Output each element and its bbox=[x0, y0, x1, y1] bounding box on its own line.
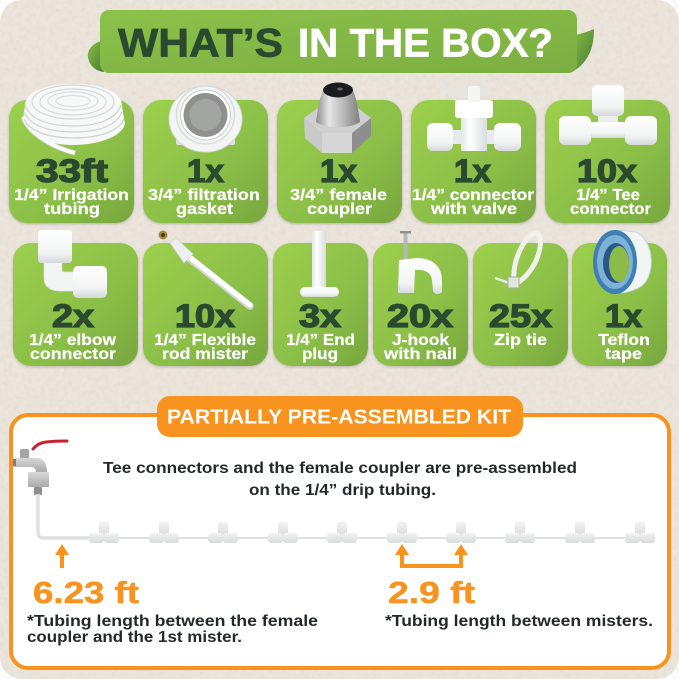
icon: J-hook with nail bbox=[398, 231, 442, 294]
label: tape bbox=[605, 346, 642, 363]
measurement: 6.23 ft: 6.23 ft bbox=[33, 575, 139, 610]
card: connector with valve bbox=[411, 86, 536, 223]
label: plug bbox=[302, 346, 338, 363]
note: mister spacing: *Tubing length between misters. bbox=[385, 613, 653, 630]
quantity: 1x bbox=[320, 153, 357, 189]
icon: elbow connector bbox=[38, 230, 107, 298]
quantity: 25x bbox=[489, 298, 552, 334]
label bbox=[570, 187, 651, 218]
title: white part: IN THE BOX? bbox=[298, 22, 553, 66]
quantity: 3x bbox=[299, 298, 341, 334]
icon: rod mister bbox=[158, 230, 250, 306]
quantity: 33ft bbox=[36, 153, 108, 189]
label: 3/4” female bbox=[290, 187, 387, 204]
label: 3/4” filtration bbox=[148, 187, 260, 204]
label: 1/4” connector bbox=[412, 187, 534, 204]
heading tab bbox=[157, 396, 523, 437]
icon: right leaf bbox=[572, 29, 594, 72]
label: gasket bbox=[176, 201, 233, 218]
label: 1/4” elbow bbox=[29, 332, 117, 349]
icon: Teflon tape bbox=[593, 230, 651, 294]
label bbox=[14, 187, 129, 218]
quantity: 2x bbox=[52, 298, 94, 334]
label: with valve bbox=[430, 201, 517, 218]
label: tubing bbox=[44, 201, 100, 218]
icon: faucet with red handle bbox=[13, 441, 67, 495]
text block: description bbox=[103, 460, 577, 499]
note: first mister distance bbox=[27, 613, 318, 646]
note: first mister distance: coupler and the 1st mister. bbox=[27, 629, 242, 646]
quantity: 10x bbox=[577, 153, 637, 189]
icon: tee connector bbox=[559, 85, 657, 145]
label: rod mister bbox=[162, 346, 248, 363]
icon: left leaf bbox=[88, 41, 104, 72]
label: 1/4” End bbox=[286, 332, 355, 349]
label bbox=[148, 187, 260, 218]
card: flexible rod mister bbox=[143, 230, 268, 366]
panel: partially pre-assembled kit bbox=[11, 396, 669, 668]
card: female coupler bbox=[277, 82, 402, 223]
icon: zip tie bbox=[495, 233, 540, 288]
card: zip tie bbox=[473, 233, 568, 366]
label: Teflon bbox=[598, 332, 650, 349]
title plate bbox=[100, 10, 577, 73]
quantity: 1x bbox=[454, 153, 491, 189]
label: coupler bbox=[307, 201, 372, 218]
quantity: 1x bbox=[605, 298, 642, 334]
heading tab: PARTIALLY PRE-ASSEMBLED KIT bbox=[167, 406, 511, 428]
icon: end plug bbox=[300, 231, 339, 297]
label bbox=[286, 332, 355, 363]
card: J-hook with nail bbox=[373, 231, 468, 366]
icon: coupler bbox=[304, 82, 371, 153]
measurement: 2.9 ft: 2.9 ft bbox=[388, 575, 475, 610]
icon: gasket bbox=[169, 86, 242, 152]
quantity: 10x bbox=[175, 298, 235, 334]
icon: tubing coil bbox=[23, 84, 125, 153]
card: 33ft tubing bbox=[9, 84, 134, 223]
drip tubing with tee connectors bbox=[38, 494, 655, 543]
label bbox=[29, 332, 117, 363]
card: Teflon tape bbox=[572, 230, 667, 366]
label bbox=[154, 332, 256, 363]
label: connector bbox=[30, 346, 116, 363]
label bbox=[598, 332, 650, 363]
card: tee connector bbox=[545, 85, 670, 223]
label: 1/4” Flexible bbox=[154, 332, 256, 349]
label: 1/4” Irrigation bbox=[14, 187, 129, 204]
label: Zip tie bbox=[494, 332, 547, 349]
label: with nail bbox=[383, 346, 457, 363]
card: end plug bbox=[273, 231, 368, 366]
title: dark part: WHAT’S bbox=[118, 22, 283, 66]
text block: description: on the 1/4” drip tubing. bbox=[249, 482, 436, 499]
text block: description: Tee connectors and the female coupler are pre-assembled bbox=[103, 460, 577, 477]
quantity: 1x bbox=[187, 153, 224, 189]
label bbox=[383, 332, 457, 363]
label: 1/4” Tee bbox=[576, 187, 640, 204]
label: connector bbox=[570, 201, 651, 218]
quantity: 20x bbox=[387, 298, 453, 334]
label bbox=[290, 187, 387, 218]
bracket arrow: 2.9 ft bbox=[395, 544, 468, 568]
card: elbow connector bbox=[13, 230, 138, 366]
arrow: 6.23 ft bbox=[55, 544, 69, 568]
label: J-hook bbox=[392, 332, 449, 349]
icon: valve connector bbox=[427, 86, 521, 151]
card: filtration gasket bbox=[143, 86, 268, 223]
label bbox=[412, 187, 534, 218]
title banner bbox=[88, 10, 594, 73]
note: first mister distance: *Tubing length between the female bbox=[27, 613, 318, 630]
